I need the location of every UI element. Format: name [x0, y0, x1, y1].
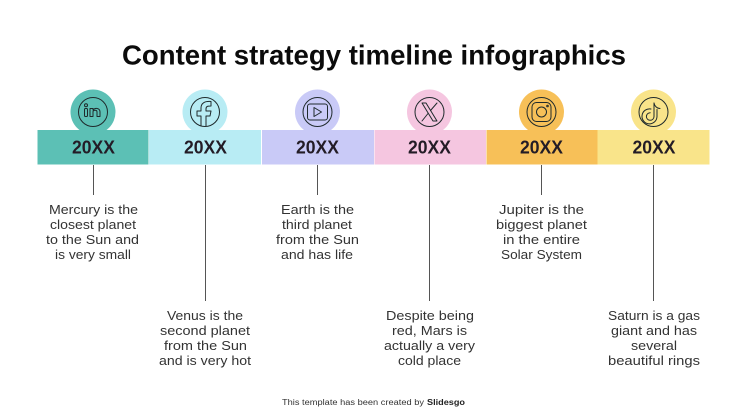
description: red, Mars is	[392, 324, 467, 338]
description: Jupiter is the	[499, 203, 584, 217]
description: Despite being	[386, 309, 474, 323]
panel: timeline column 6	[598, 90, 710, 368]
description: from the Sun	[164, 339, 247, 353]
description: cold place	[398, 354, 461, 368]
year bar	[374, 130, 486, 164]
description: is very small	[55, 248, 131, 262]
icon: facebook	[182, 90, 228, 134]
description: from the Sun	[276, 233, 359, 247]
panel: timeline column 3	[262, 90, 374, 262]
description	[46, 203, 139, 262]
description	[496, 203, 588, 262]
connector	[92, 165, 94, 195]
connector	[652, 165, 654, 301]
description: closest planet	[50, 218, 137, 232]
year bar	[486, 130, 598, 164]
description: in the entire	[503, 233, 580, 247]
description: Solar System	[501, 248, 582, 262]
footer credit: This template has been created by	[282, 398, 424, 407]
description: third planet	[282, 218, 353, 232]
panel: timeline column 2	[149, 90, 261, 368]
description	[608, 309, 700, 368]
year bar	[262, 130, 374, 164]
year bar: 20XX	[184, 138, 227, 158]
description	[384, 309, 476, 368]
year bar: 20XX	[632, 138, 676, 158]
footer credit: Slidesgo	[427, 398, 465, 407]
description: second planet	[160, 324, 251, 338]
panel: timeline column 1	[38, 90, 148, 262]
year bar	[38, 130, 148, 164]
description: several	[631, 339, 677, 353]
panel: timeline column 4	[374, 90, 486, 368]
title: Content strategy timeline infographics	[122, 40, 626, 70]
icon: instagram	[519, 90, 564, 134]
connector	[204, 165, 206, 301]
icon: x	[407, 90, 452, 134]
description: biggest planet	[496, 218, 588, 232]
year bar	[598, 130, 710, 164]
description: Venus is the	[167, 309, 243, 323]
description: and is very hot	[159, 354, 252, 368]
description	[276, 203, 359, 262]
description: Saturn is a gas	[608, 309, 700, 323]
footer credit	[282, 398, 465, 407]
description: Mercury is the	[49, 203, 138, 217]
year bar: 20XX	[408, 138, 451, 158]
description: actually a very	[384, 339, 476, 353]
description	[159, 309, 252, 368]
year bar	[149, 130, 261, 164]
description: to the Sun and	[46, 233, 139, 247]
description: beautiful rings	[608, 354, 700, 368]
description: and has life	[281, 248, 353, 262]
year bar: 20XX	[520, 138, 563, 158]
connector	[428, 165, 430, 301]
year bar: 20XX	[72, 138, 115, 158]
icon: tiktok	[631, 90, 676, 134]
description: Earth is the	[281, 203, 354, 217]
panel: timeline column 5	[486, 90, 598, 262]
description: giant and has	[611, 324, 697, 338]
icon: linkedin	[70, 90, 116, 134]
icon: video player	[295, 90, 340, 134]
connector	[316, 165, 318, 195]
connector	[540, 165, 542, 195]
year bar: 20XX	[296, 138, 339, 158]
